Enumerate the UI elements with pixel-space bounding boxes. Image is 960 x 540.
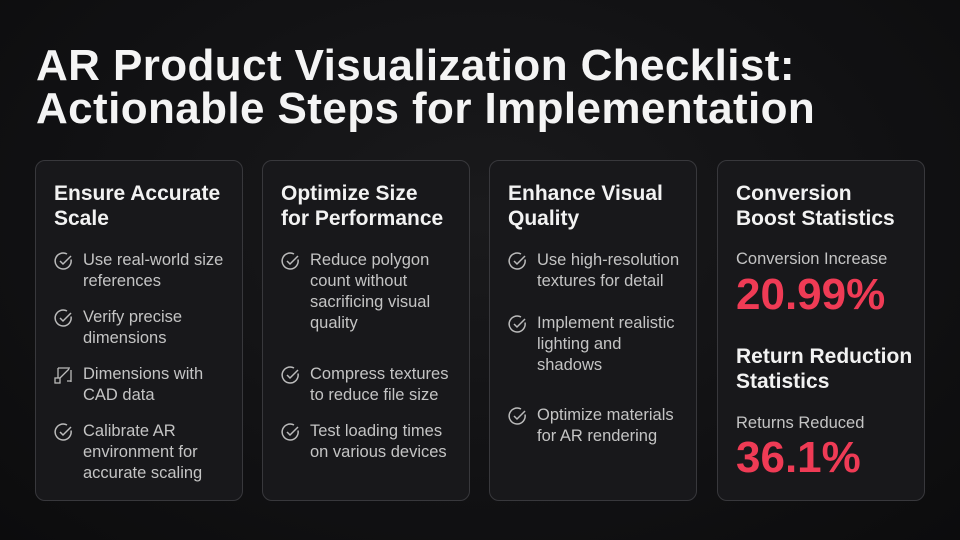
heading: optimize size: for Performance	[281, 207, 443, 230]
heading: enhance visual quality	[508, 182, 663, 230]
stat: 20.99%: 20.99%	[736, 270, 885, 319]
item: test loading: Test loading times	[310, 422, 442, 440]
item: high-res textures: Use high-resolution	[537, 251, 679, 269]
stat: 36.1%: 36.1%	[736, 433, 861, 482]
panel: enhance visual quality	[489, 160, 697, 501]
heading: return reduction: Statistics	[736, 370, 829, 393]
heading: return reduction	[736, 345, 912, 393]
item: real-world size	[54, 251, 223, 290]
item: CAD data	[54, 365, 203, 404]
item: verify dimensions: Verify precise	[83, 308, 182, 326]
item: compress textures: Compress textures	[310, 365, 448, 383]
item: real-world size: references	[83, 272, 161, 290]
item: high-res textures: textures for detail	[537, 272, 664, 290]
item: lighting: lighting and	[537, 335, 621, 353]
item: reduce polygon: quality	[310, 314, 358, 332]
heading: conversion boost	[736, 182, 895, 230]
item: test loading	[281, 422, 447, 461]
item: CAD data: CAD data	[83, 386, 155, 404]
heading: ensure accurate scale: Ensure Accurate	[54, 182, 220, 205]
item: CAD data: Dimensions with	[83, 365, 203, 383]
item: reduce polygon	[281, 251, 430, 332]
item: compress textures: to reduce file size	[310, 386, 438, 404]
heading: optimize size	[281, 182, 443, 230]
item: compress textures	[281, 365, 448, 404]
title	[36, 41, 815, 133]
item: lighting	[508, 314, 675, 374]
item: calibrate: Calibrate AR	[83, 422, 176, 440]
item: lighting: Implement realistic	[537, 314, 675, 332]
item: materials	[508, 406, 674, 445]
title: AR Product Visualization Checklist:	[36, 41, 795, 90]
item: test loading: on various devices	[310, 443, 447, 461]
item: real-world size: Use real-world size	[83, 251, 223, 269]
label: returns reduced: Returns Reduced	[736, 414, 864, 432]
item: reduce polygon: Reduce polygon	[310, 251, 429, 269]
panel: statistics	[717, 160, 925, 501]
item: materials: Optimize materials	[537, 406, 674, 424]
item: high-res textures	[508, 251, 679, 290]
label: conversion increase: Conversion Increase	[736, 250, 887, 268]
item: verify dimensions: dimensions	[83, 329, 166, 347]
panel: optimize size	[262, 160, 470, 501]
item: reduce polygon: count without	[310, 272, 407, 290]
item: calibrate	[54, 422, 202, 482]
heading: ensure accurate scale: Scale	[54, 207, 109, 230]
heading: return reduction: Return Reduction	[736, 345, 912, 368]
heading: conversion boost: Boost Statistics	[736, 207, 895, 230]
item: materials: for AR rendering	[537, 427, 657, 445]
item: verify dimensions	[54, 308, 182, 347]
heading: conversion boost: Conversion	[736, 182, 852, 205]
title: Actionable Steps for Implementation	[36, 84, 815, 133]
heading: enhance visual quality: Quality	[508, 207, 579, 230]
heading: enhance visual quality: Enhance Visual	[508, 182, 663, 205]
item: reduce polygon: sacrificing visual	[310, 293, 430, 311]
item: calibrate: environment for	[83, 443, 198, 461]
heading: optimize size: Optimize Size	[281, 182, 418, 205]
item: calibrate: accurate scaling	[83, 464, 202, 482]
heading: ensure accurate scale	[54, 182, 220, 230]
item: lighting: shadows	[537, 356, 602, 374]
panel: ensure accurate scale	[35, 160, 243, 501]
